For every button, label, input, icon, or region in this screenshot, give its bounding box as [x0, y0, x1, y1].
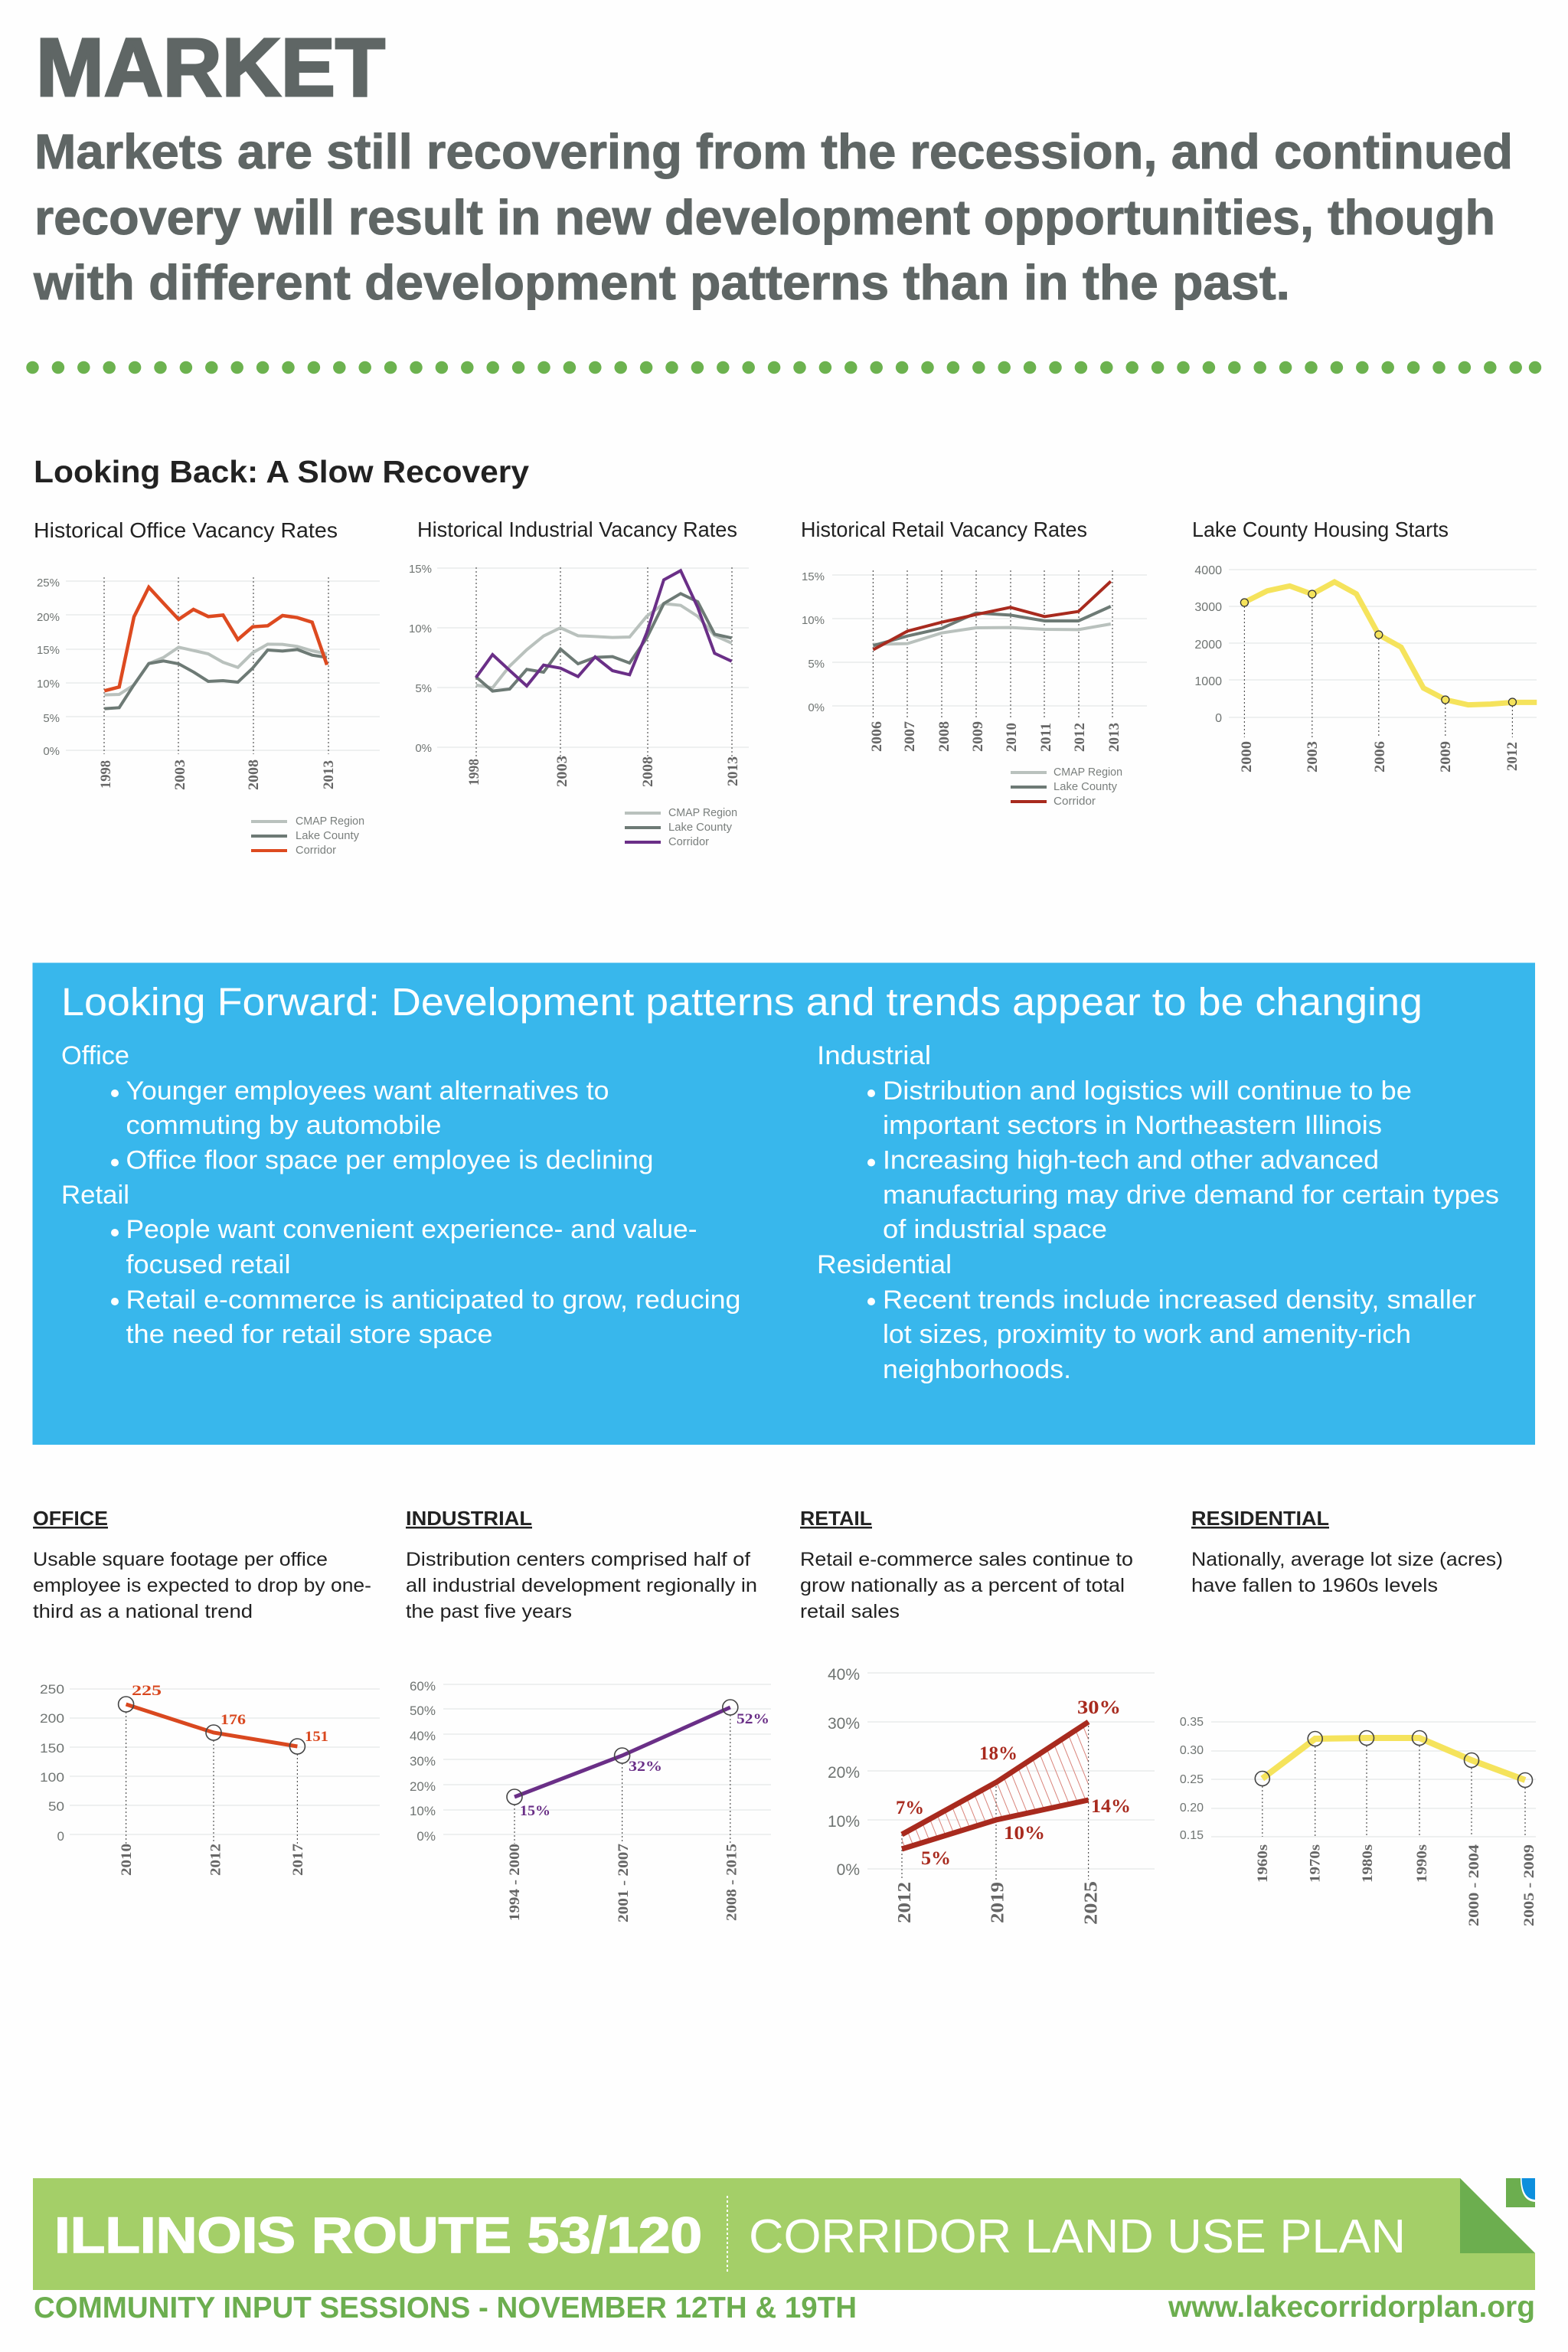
- value labels: 5%: [921, 1848, 951, 1869]
- x axis years: 2012: [208, 1844, 224, 1876]
- chart title: Lake County Housing Starts: [1192, 518, 1449, 541]
- x axis periods: 1960s: [1255, 1844, 1271, 1883]
- left column: office and retail: Retail: [61, 1181, 129, 1210]
- y axis labels: 30%: [828, 1715, 860, 1733]
- text block: office: third as a national trend: [33, 1601, 253, 1622]
- chart: historical retail vacancy rates: [801, 518, 1147, 808]
- y axis labels: 25%: [37, 577, 60, 590]
- data line: [1263, 1738, 1525, 1780]
- right column: industrial and residential: of industrial space: [883, 1215, 1107, 1244]
- left column: office and retail: People want convenient experience- and value-: [126, 1215, 697, 1244]
- x axis years: [98, 760, 337, 790]
- x axis years: 2013: [725, 756, 741, 786]
- x axis periods: 2000 - 2004: [1466, 1844, 1482, 1926]
- chart title: Historical Retail Vacancy Rates: [801, 518, 1087, 541]
- y axis labels: [410, 1679, 436, 1844]
- x axis years: 2017: [290, 1843, 306, 1876]
- legend: [625, 807, 737, 848]
- y axis labels: 0%: [837, 1861, 860, 1879]
- chart: historical industrial vacancy rates: [409, 518, 749, 848]
- x axis years: 2003: [554, 756, 570, 787]
- text block: office: [33, 1507, 371, 1622]
- x axis years: [466, 756, 741, 787]
- y axis labels: 60%: [410, 1679, 436, 1694]
- text block: industrial: [406, 1507, 757, 1622]
- y axis labels: 3000: [1194, 601, 1222, 614]
- footer banner: [33, 2178, 1535, 2290]
- x axis periods: 1990s: [1414, 1844, 1430, 1883]
- y axis labels: [37, 577, 60, 758]
- x axis years: 2008: [640, 756, 656, 787]
- y axis labels: [1194, 564, 1222, 725]
- left column: office and retail: [61, 1041, 741, 1349]
- y axis labels: 40%: [828, 1666, 860, 1684]
- icon: corner logo: [1506, 2178, 1535, 2207]
- x axis years: 2009: [970, 721, 986, 752]
- legend: Lake County: [296, 830, 360, 842]
- subtitle text block: recovery will result in new development opportunities, though: [34, 190, 1495, 245]
- y axis labels: 10%: [802, 614, 825, 627]
- x axis periods: [1255, 1844, 1537, 1926]
- right column: industrial and residential: lot sizes, proximity to work and amenity-rich: [883, 1320, 1411, 1349]
- data lines: [873, 581, 1111, 650]
- x axis periods: 2008 - 2015: [724, 1844, 740, 1921]
- right column: industrial and residential: neighborhoods.: [883, 1355, 1071, 1384]
- y axis labels: 0.15: [1180, 1829, 1204, 1842]
- legend: [1011, 766, 1122, 808]
- chart: lake county housing starts: [1192, 518, 1537, 773]
- x axis periods: 2005 - 2009: [1521, 1844, 1537, 1926]
- text block: residential: Nationally, average lot size (acres): [1191, 1549, 1503, 1570]
- value labels: 225: [132, 1683, 162, 1699]
- chart: office square footage: [40, 1682, 380, 1876]
- y axis labels: 4000: [1194, 564, 1222, 577]
- y axis labels: 15%: [802, 570, 825, 583]
- text block: office: employee is expected to drop by one-: [33, 1575, 371, 1596]
- x axis years: 2012: [1072, 723, 1088, 752]
- text block: retail: RETAIL: [800, 1507, 872, 1530]
- right column: industrial and residential: Recent trends include increased density, smaller: [883, 1285, 1476, 1315]
- x axis years: 2000: [1239, 741, 1255, 773]
- value labels: 10%: [1004, 1823, 1045, 1844]
- left column: office and retail: Retail e-commerce is anticipated to grow, reducing: [126, 1285, 741, 1315]
- y axis labels: 150: [40, 1741, 64, 1756]
- subtitle text block: with different development patterns than in the past.: [33, 255, 1290, 310]
- x axis years: 1998: [466, 759, 482, 786]
- text block: retail: Retail e-commerce sales continue to: [800, 1549, 1133, 1570]
- y axis labels: 1000: [1194, 675, 1222, 688]
- y axis labels: 0: [57, 1829, 64, 1844]
- y axis labels: 0.25: [1180, 1773, 1204, 1786]
- x axis periods: [507, 1843, 740, 1922]
- x axis years: 2009: [1438, 741, 1454, 773]
- value labels: [132, 1683, 328, 1745]
- legend: [251, 815, 364, 857]
- text block: retail: retail sales: [800, 1601, 900, 1622]
- x axis years: 2011: [1038, 723, 1054, 752]
- y axis labels: 5%: [415, 682, 432, 695]
- value labels: 151: [305, 1729, 328, 1745]
- x axis years: 2003: [172, 760, 188, 790]
- y axis labels: 50: [48, 1799, 64, 1814]
- y axis labels: 10%: [828, 1813, 860, 1831]
- text block: residential: RESIDENTIAL: [1191, 1507, 1329, 1530]
- y axis labels: 2000: [1194, 639, 1222, 652]
- left column: office and retail: Office floor space per employee is declining: [126, 1145, 654, 1174]
- chart: industrial distribution share: [410, 1679, 771, 1922]
- right column: industrial and residential: important sectors in Northeastern Illinois: [883, 1111, 1382, 1140]
- banner title: ILLINOIS ROUTE 53/120: [54, 2207, 702, 2263]
- legend: Lake County: [1054, 781, 1118, 793]
- left column: office and retail: the need for retail store space: [126, 1320, 493, 1349]
- value labels: 32%: [629, 1759, 662, 1775]
- legend: Corridor: [1054, 795, 1096, 808]
- x axis years: 2013: [1106, 723, 1122, 752]
- x axis periods: 1994 - 2000: [507, 1844, 523, 1921]
- right column: industrial and residential: Industrial: [817, 1041, 931, 1070]
- y axis labels: 250: [40, 1682, 64, 1697]
- right column: industrial and residential: [817, 1041, 1499, 1384]
- legend: Corridor: [296, 844, 336, 857]
- community sessions line: COMMUNITY INPUT SESSIONS - NOVEMBER 12TH & 19TH: [34, 2292, 857, 2324]
- y axis labels: 50%: [410, 1704, 436, 1718]
- x axis years: 2006: [1372, 741, 1388, 773]
- x axis years: [119, 1843, 306, 1876]
- x axis years: 2013: [321, 760, 337, 789]
- title: MARKET: [36, 21, 385, 113]
- y axis labels: 200: [40, 1711, 64, 1726]
- x axis years: [895, 1881, 1102, 1925]
- value labels: 30%: [1077, 1697, 1121, 1718]
- data point markers: [1240, 590, 1516, 706]
- right column: industrial and residential: Residential: [817, 1250, 952, 1279]
- chart: historical office vacancy rates: [34, 518, 380, 857]
- y axis labels: 20%: [410, 1779, 436, 1794]
- y axis labels: 0%: [808, 701, 825, 714]
- left column: office and retail: focused retail: [126, 1250, 291, 1279]
- y axis labels: 15%: [409, 563, 432, 576]
- hatched range area: [902, 1722, 1089, 1849]
- y axis labels: 20%: [37, 611, 60, 624]
- x axis periods: 1980s: [1360, 1844, 1376, 1883]
- right column: industrial and residential: Increasing high-tech and other advanced: [883, 1145, 1379, 1174]
- value labels: 176: [220, 1712, 246, 1728]
- y axis labels: 0%: [43, 745, 60, 758]
- x axis years: [1239, 741, 1521, 773]
- y axis labels: 10%: [37, 678, 60, 691]
- y axis labels: 100: [40, 1770, 64, 1785]
- text block: industrial: all industrial development regionally in: [406, 1575, 757, 1596]
- x axis years: 2003: [1305, 741, 1321, 773]
- right column: industrial and residential: manufacturing may drive demand for certain types: [883, 1181, 1499, 1210]
- x axis years: [869, 720, 1122, 752]
- value labels: [896, 1697, 1131, 1869]
- x axis years: 2006: [869, 721, 885, 752]
- y axis labels: 5%: [43, 712, 60, 725]
- legend: CMAP Region: [1054, 766, 1122, 779]
- x axis years: 1998: [98, 760, 114, 789]
- chart title: Historical Industrial Vacancy Rates: [417, 518, 737, 541]
- text block: residential: have fallen to 1960s levels: [1191, 1575, 1438, 1596]
- y axis labels: [1180, 1716, 1204, 1842]
- value labels: 15%: [520, 1803, 550, 1819]
- value labels: 14%: [1091, 1796, 1131, 1817]
- banner subtitle: CORRIDOR LAND USE PLAN: [749, 2210, 1406, 2263]
- y axis labels: 30%: [410, 1754, 436, 1769]
- subtitle text block: Markets are still recovering from the recession, and continued: [34, 124, 1513, 179]
- y axis labels: 0.20: [1180, 1802, 1204, 1815]
- y axis labels: 10%: [409, 622, 432, 635]
- subtitle text block: [33, 124, 1513, 310]
- value labels: [520, 1711, 769, 1819]
- right column: industrial and residential: Distribution and logistics will continue to be: [883, 1076, 1412, 1106]
- data line: [1244, 582, 1537, 705]
- y axis labels: 40%: [410, 1729, 436, 1743]
- heading: looking back: Looking Back: A Slow Recovery: [34, 454, 529, 489]
- y axis labels: 5%: [808, 658, 825, 671]
- x axis years: 2025: [1082, 1881, 1102, 1925]
- value labels: 18%: [979, 1743, 1018, 1764]
- x axis periods: 2001 - 2007: [616, 1843, 632, 1922]
- y axis labels: [409, 563, 432, 755]
- y axis labels: 15%: [37, 644, 60, 657]
- left column: office and retail: commuting by automobile: [126, 1111, 441, 1140]
- y axis labels: 0%: [415, 742, 432, 755]
- x axis years: 2012: [1504, 742, 1521, 771]
- x axis periods: 1970s: [1308, 1844, 1323, 1883]
- chart title: Historical Office Vacancy Rates: [34, 518, 338, 542]
- legend: Lake County: [668, 822, 733, 834]
- left column: office and retail: Younger employees want alternatives to: [126, 1076, 609, 1106]
- y axis labels: 10%: [410, 1804, 436, 1818]
- data point markers: [119, 1697, 305, 1754]
- y axis labels: 0.35: [1180, 1716, 1204, 1729]
- x axis years: 2010: [1004, 723, 1020, 752]
- x axis years: 2010: [119, 1844, 135, 1876]
- chart: retail e-commerce share: [828, 1666, 1155, 1925]
- x axis years: 2008: [246, 760, 262, 790]
- data point markers: [1255, 1730, 1533, 1787]
- y axis labels: 0%: [416, 1829, 436, 1844]
- x axis years: 2012: [895, 1882, 915, 1923]
- dotted green divider: [32, 361, 1541, 374]
- text block: industrial: the past five years: [406, 1601, 572, 1622]
- text block: residential: [1191, 1507, 1503, 1596]
- y axis labels: [828, 1666, 860, 1879]
- chart: residential lot size: [1180, 1716, 1537, 1926]
- legend: CMAP Region: [296, 815, 364, 828]
- text block: industrial: Distribution centers comprised half of: [406, 1549, 750, 1570]
- text block: retail: [800, 1507, 1133, 1622]
- value labels: 7%: [896, 1798, 924, 1818]
- legend: CMAP Region: [668, 807, 737, 819]
- data lines: [476, 570, 732, 691]
- left column: office and retail: Office: [61, 1041, 129, 1070]
- upper and lower range lines: [902, 1722, 1089, 1849]
- legend: Corridor: [668, 836, 709, 848]
- panel heading: Looking Forward: Development patterns and trends appear to be changing: [61, 980, 1423, 1024]
- text block: retail: grow nationally as a percent of total: [800, 1575, 1125, 1596]
- icon: folded corner: [1460, 2178, 1535, 2253]
- data line: [126, 1704, 297, 1746]
- y axis labels: [40, 1682, 64, 1844]
- text block: office: OFFICE: [33, 1507, 108, 1530]
- panel: looking forward: [32, 963, 1535, 1445]
- y axis labels: [802, 570, 825, 714]
- y axis labels: 0: [1215, 712, 1222, 725]
- y axis labels: 0.30: [1180, 1744, 1204, 1757]
- text block: industrial: INDUSTRIAL: [406, 1507, 532, 1530]
- website: www.lakecorridorplan.org: [1168, 2291, 1535, 2324]
- data lines: [104, 587, 327, 709]
- x axis years: 2008: [936, 721, 952, 752]
- value labels: 52%: [737, 1711, 769, 1727]
- y axis labels: 20%: [828, 1764, 860, 1782]
- data line: [514, 1707, 730, 1797]
- x axis years: 2007: [902, 720, 918, 752]
- data point markers: [507, 1700, 738, 1805]
- x axis years: 2019: [988, 1882, 1008, 1923]
- text block: office: Usable square footage per office: [33, 1549, 328, 1570]
